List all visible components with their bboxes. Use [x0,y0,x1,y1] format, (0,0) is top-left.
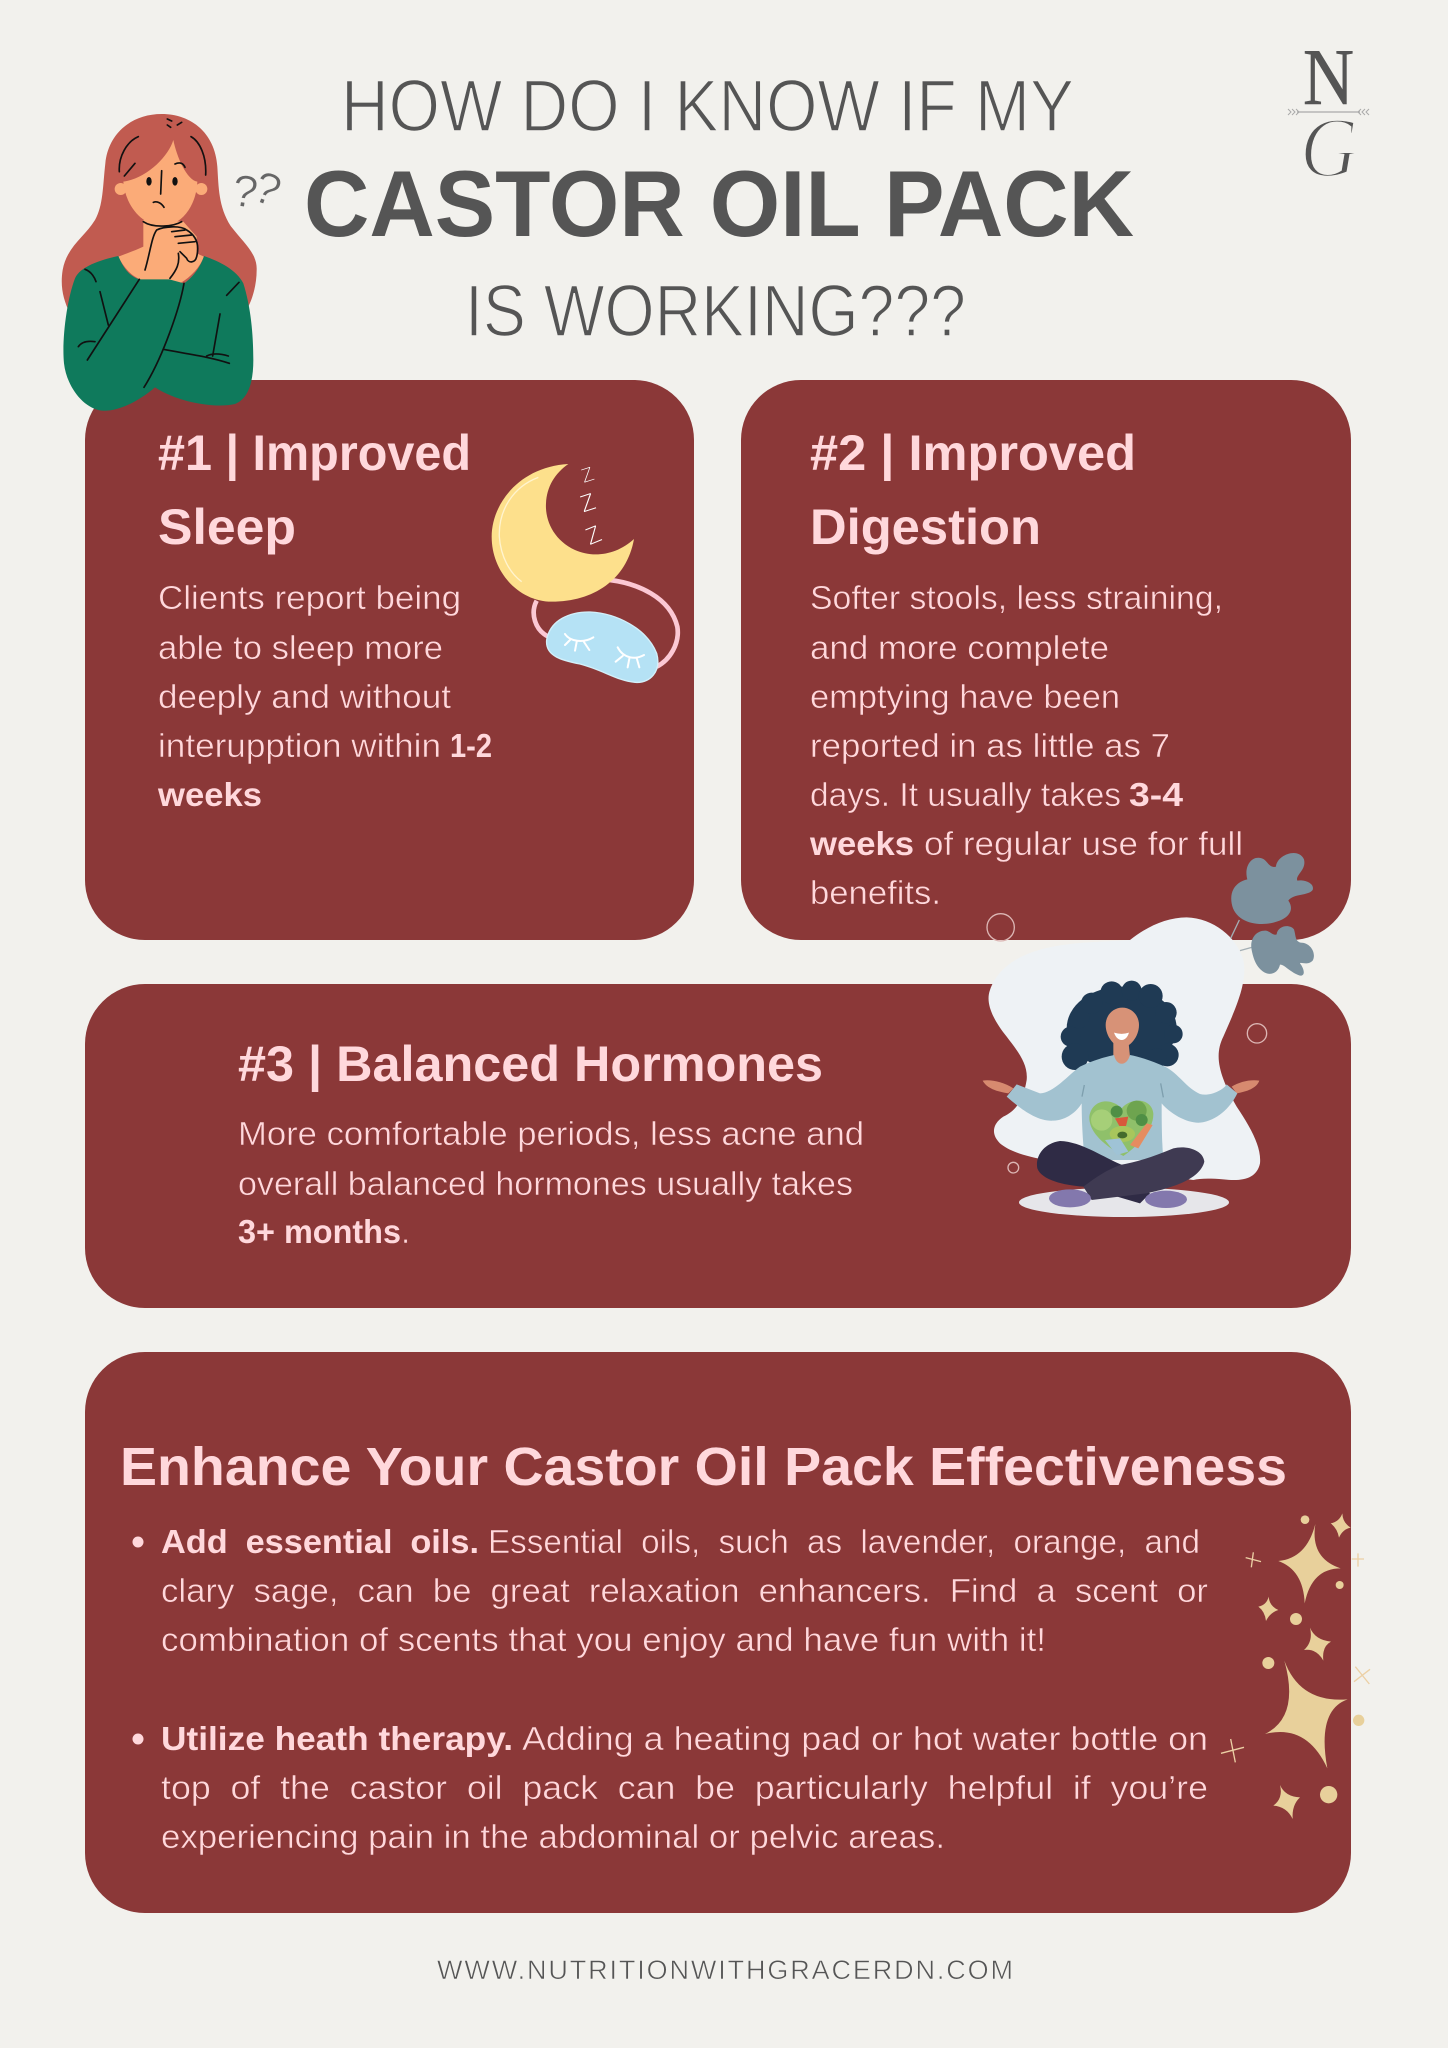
logo: NG monogram: N [1303,32,1354,122]
title [304,66,1134,352]
heading: improved sleep: #1 | Improved [158,425,471,482]
heading: improved sleep: Sleep [158,499,296,555]
icon: sleeping z letters: Z [577,488,599,519]
text: digestion body [809,579,1243,911]
icon: sleeping z letters [577,462,606,551]
icon: question marks [229,161,288,218]
title: HOW DO I KNOW IF MY [341,66,1074,147]
text: sleep body: 1-2 [450,727,492,764]
icon: sleeping z letters: Z [582,520,606,551]
icon: moon and sleep mask [492,462,678,682]
heading: improved digestion: #2 | Improved [810,425,1136,482]
panel: improved digestion [741,380,1351,940]
text: essential oils bullet: Add essential oils. [161,1523,479,1560]
text: essential oils bullet: combination of scents that you enjoy and have fun with it! [161,1621,1046,1658]
text: essential oils bullet [132,1523,1208,1658]
text: sleep body: interupption within [158,727,441,764]
icon: thinking woman [62,114,288,411]
text: hormones body: More comfortable periods, less acne and [238,1115,864,1152]
text: heat therapy bullet: Utilize heath therapy. [161,1720,513,1757]
heading: improved digestion [810,425,1136,555]
text: essential oils bullet: Essential oils, such as lavender, orange, and [488,1523,1200,1560]
icon: question marks: ? [229,164,261,218]
title: CASTOR OIL PACK [304,151,1134,256]
text: digestion body: and more complete [810,629,1109,666]
logo: NG monogram: G [1300,99,1358,195]
text: digestion body: weeks [809,825,914,862]
text: digestion body: days. It usually takes [810,776,1121,813]
text: sleep body: weeks [157,776,262,813]
text: heat therapy bullet: Adding a heating pad or hot water bottle on [522,1720,1208,1757]
title: IS WORKING??? [465,271,966,352]
text: hormones body [238,1115,864,1250]
text: digestion body: emptying have been [810,678,1120,715]
text: sleep body [157,579,492,813]
text: digestion body: 3-4 [1129,776,1184,813]
logo: NG monogram [1288,32,1369,195]
icon: sleeping z letters: Z [578,462,597,488]
text: hormones body: 3+ months [238,1213,401,1250]
panel: enhance effectiveness [85,1352,1351,1913]
text: heat therapy bullet: experiencing pain in the abdominal or pelvic areas. [161,1818,945,1855]
icon: meditating woman [983,853,1314,1217]
heading: balanced hormones: #3 | Balanced Hormones [238,1036,823,1093]
icon: question marks: ? [247,161,288,217]
text: hormones body: overall balanced hormones usually takes [238,1165,853,1202]
footer: website: WWW.NUTRITIONWITHGRACERDN.COM [437,1955,1013,1985]
text: sleep body: able to sleep more [158,629,443,666]
panel: improved sleep [85,380,694,940]
icon: vegetable heart [1089,1101,1153,1156]
heading: improved sleep [158,425,471,555]
text: hormones body: . [401,1213,410,1250]
panel: balanced hormones [85,984,1351,1308]
text: sleep body: deeply and without [158,678,451,715]
heading: improved digestion: Digestion [810,499,1041,555]
text: digestion body: Softer stools, less straining, [810,579,1223,616]
text: heat therapy bullet: top of the castor oil pack can be particularly helpful if you’re [161,1769,1208,1806]
text: digestion body: reported in as little as 7 [810,727,1170,764]
text: heat therapy bullet [132,1720,1208,1855]
text: sleep body: Clients report being [158,579,461,616]
heading: enhance effectiveness: Enhance Your Castor Oil Pack Effectiveness [120,1437,1287,1497]
text: digestion body: of regular use for full [924,825,1243,862]
text: digestion body: benefits. [810,874,941,911]
icon: sparkles [1221,1513,1370,1819]
text: essential oils bullet: clary sage, can be great relaxation enhancers. Find a scent or [161,1572,1208,1609]
